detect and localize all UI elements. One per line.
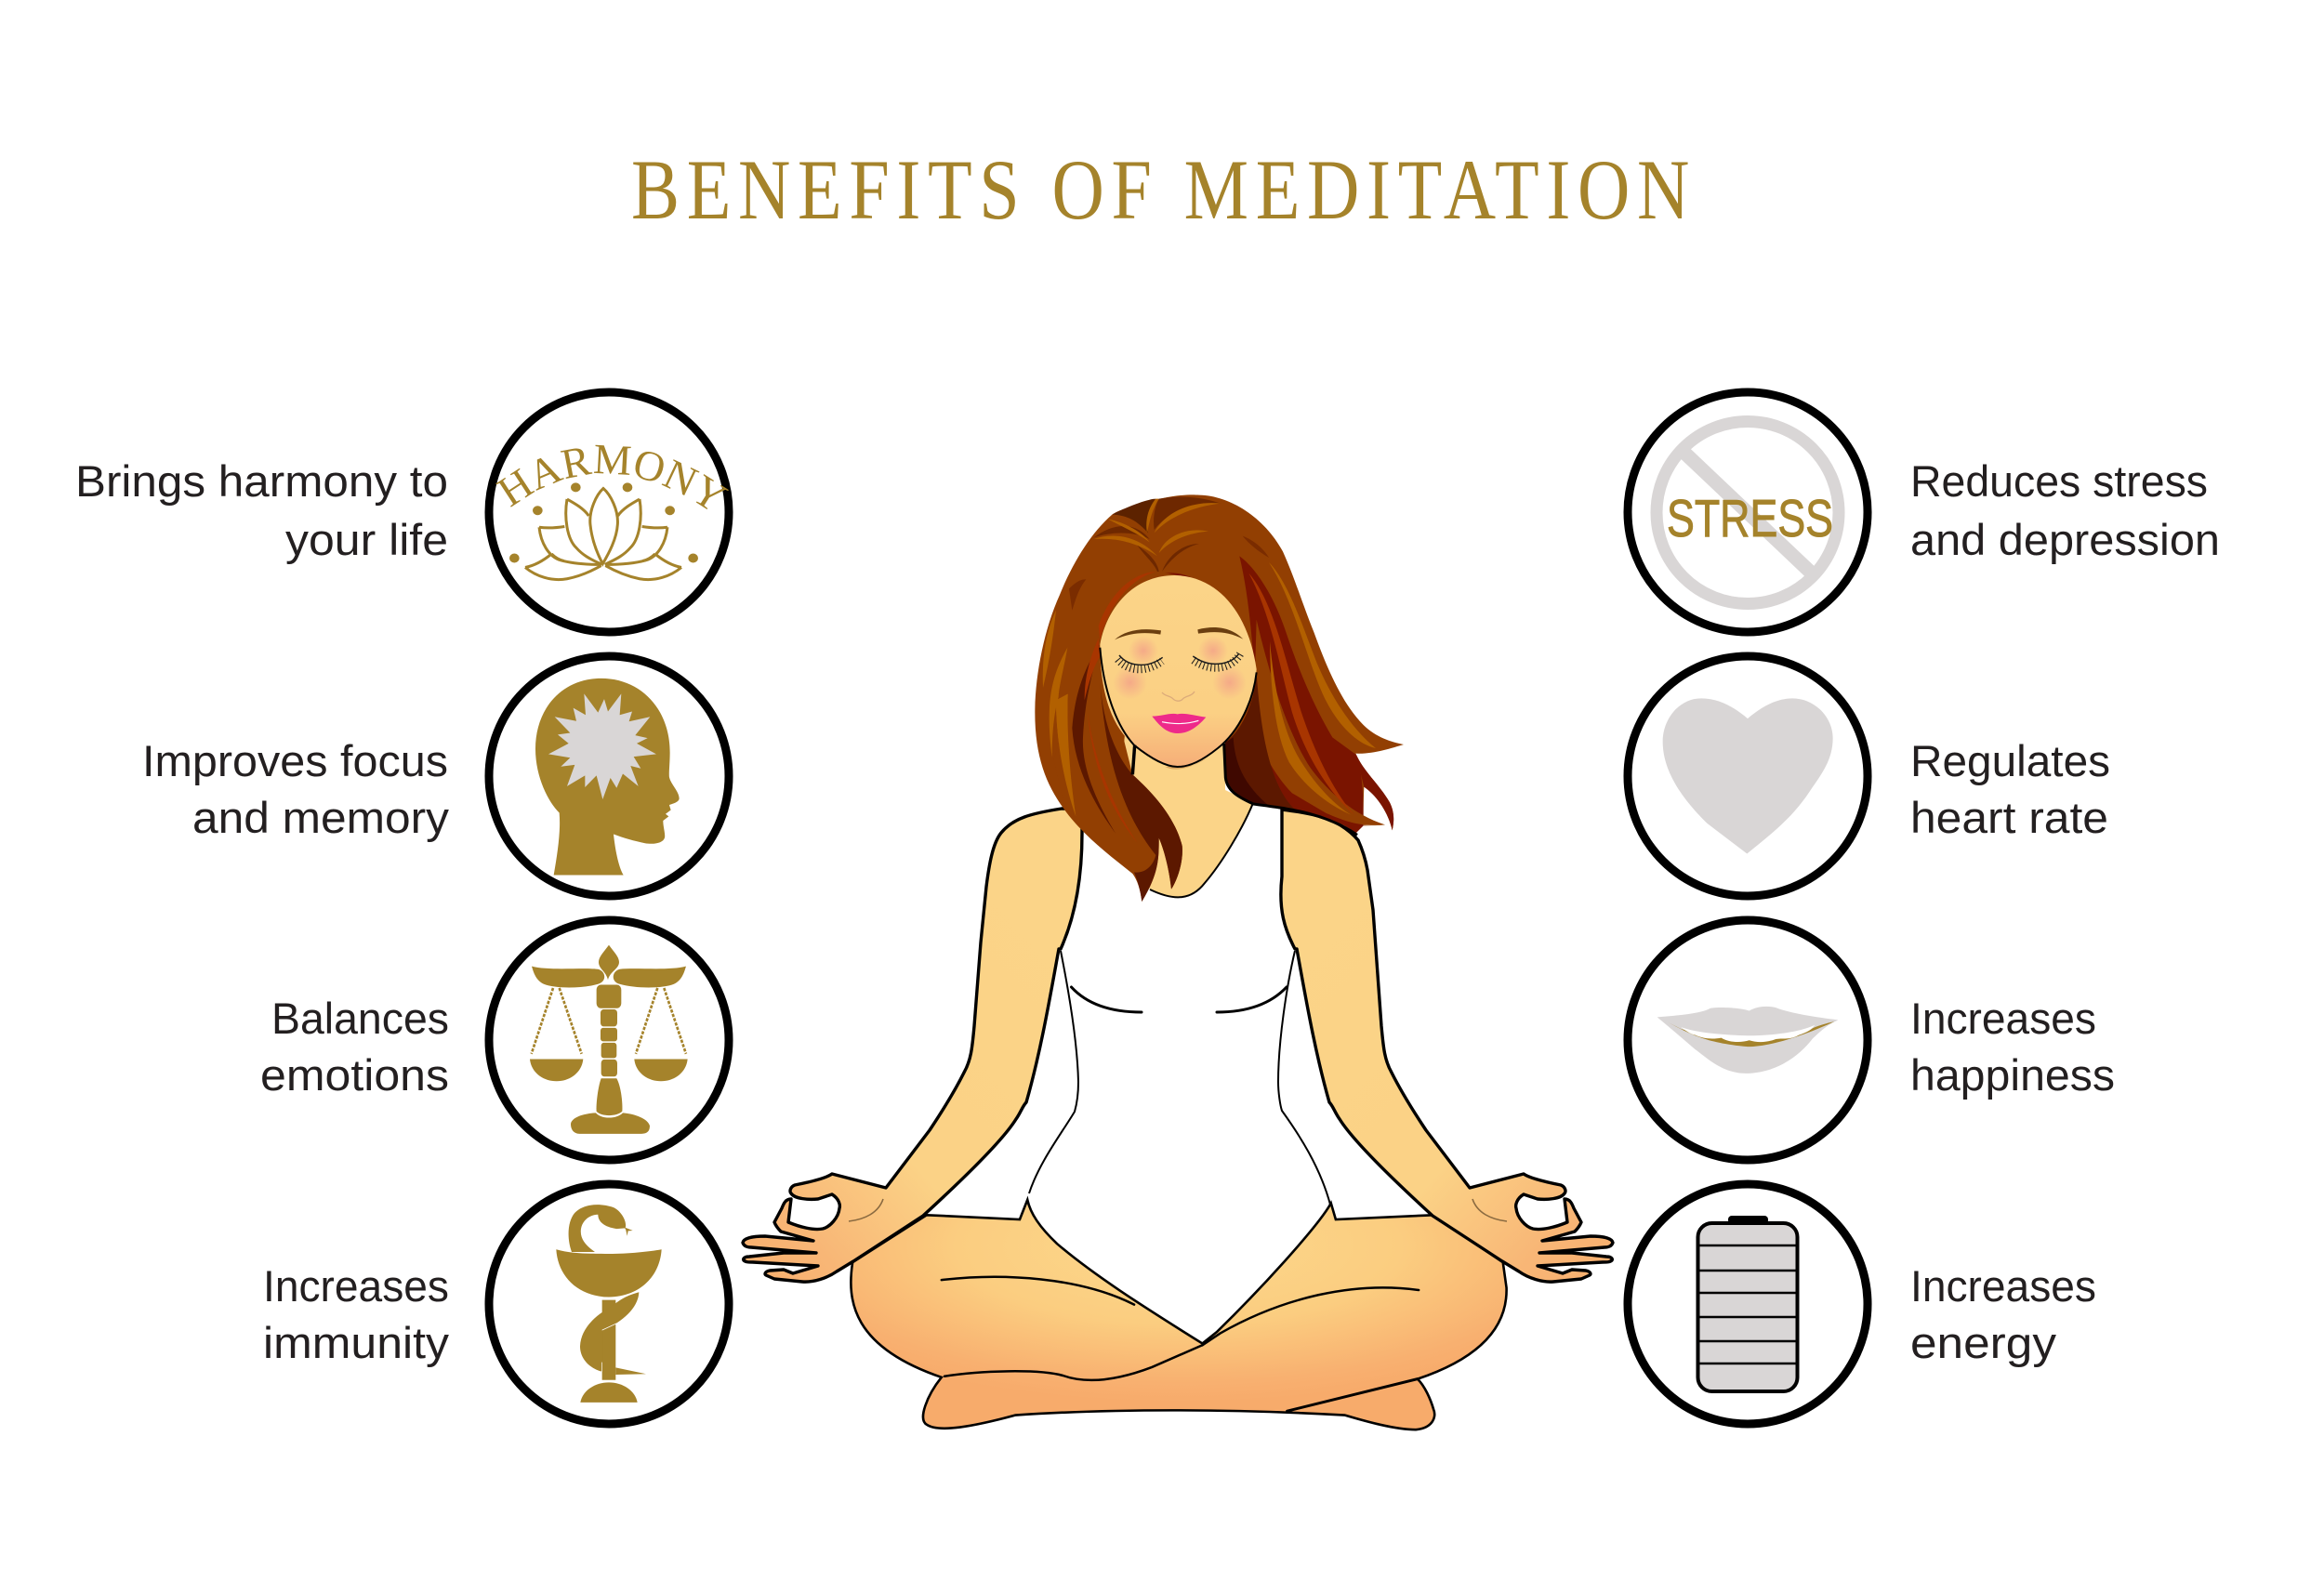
icon: head with burst	[535, 678, 680, 876]
panel: happiness	[1628, 920, 2115, 1160]
label: heart: Regulates	[1910, 736, 2110, 785]
label: heart: heart rate	[1910, 793, 2108, 842]
label: happiness: Increases	[1910, 994, 2096, 1043]
icon: scales	[530, 945, 688, 1134]
icon: stress word: STRESS	[1667, 489, 1833, 548]
right arm	[1281, 810, 1613, 1282]
label: stress: and depression	[1910, 515, 2220, 564]
front hair lock	[1053, 639, 1182, 902]
cheek and eye blush	[1113, 636, 1247, 700]
label: happiness: happiness	[1910, 1050, 2115, 1100]
icon: lotus	[509, 482, 698, 580]
label: emotions: emotions	[260, 1050, 449, 1100]
hair back	[1035, 494, 1404, 834]
icon: harmony text: HARMONY	[495, 444, 729, 509]
label: immunity: Increases	[263, 1261, 449, 1311]
label: immunity: immunity	[263, 1318, 450, 1367]
label: happiness	[1910, 994, 2115, 1100]
neckline	[1150, 803, 1253, 897]
icon ring: stress	[1628, 392, 1868, 632]
label: harmony: Brings harmony to	[75, 456, 448, 506]
label: energy: energy	[1910, 1318, 2057, 1367]
panel: emotions	[260, 920, 729, 1160]
icon: heart	[1663, 698, 1833, 854]
eyebrows	[1115, 627, 1243, 639]
label: stress	[1910, 456, 2220, 564]
white top outlines	[1029, 951, 1330, 1205]
icon ring: immunity	[489, 1184, 729, 1424]
label: energy: Increases	[1910, 1261, 2096, 1311]
label: focus: and memory	[192, 793, 450, 842]
icon ring: focus	[489, 656, 729, 896]
label: emotions: Balances	[271, 994, 449, 1043]
icon: smile	[1657, 1007, 1838, 1074]
label: emotions	[260, 994, 449, 1100]
left arm	[743, 809, 1082, 1282]
label: immunity	[263, 1261, 450, 1367]
label: harmony: your life	[285, 515, 448, 564]
icon ring: energy	[1628, 1184, 1868, 1424]
wrist creases	[849, 1199, 1507, 1221]
closed eyes with lashes	[1118, 653, 1240, 669]
icon: no symbol	[1657, 422, 1839, 604]
icon ring: heart	[1628, 656, 1868, 896]
icon: battery	[1697, 1216, 1798, 1391]
meditating woman figure	[743, 494, 1613, 1429]
label: harmony	[75, 456, 448, 564]
panel: heart	[1628, 656, 2110, 896]
face	[1100, 575, 1357, 835]
panel: immunity	[263, 1184, 729, 1424]
label: focus: Improves focus	[142, 736, 448, 785]
label: heart	[1910, 736, 2110, 842]
label: focus	[142, 736, 450, 842]
panel: harmony	[75, 389, 733, 666]
icon ring: harmony	[489, 392, 729, 632]
panel: energy	[1628, 1184, 2096, 1424]
crossed legs	[851, 1200, 1507, 1429]
label: energy	[1910, 1261, 2096, 1367]
icon: bowl of hygieia	[556, 1205, 662, 1403]
icon ring: happiness	[1628, 920, 1868, 1160]
panel: focus	[142, 656, 729, 896]
nose	[1162, 692, 1195, 701]
lips	[1152, 714, 1206, 733]
title: BENEFITS OF MEDITATION	[631, 142, 1697, 237]
neck and chest	[1116, 734, 1253, 897]
panel: stress	[1628, 392, 2220, 632]
label: stress: Reduces stress	[1910, 456, 2208, 506]
icon ring: emotions	[489, 920, 729, 1160]
